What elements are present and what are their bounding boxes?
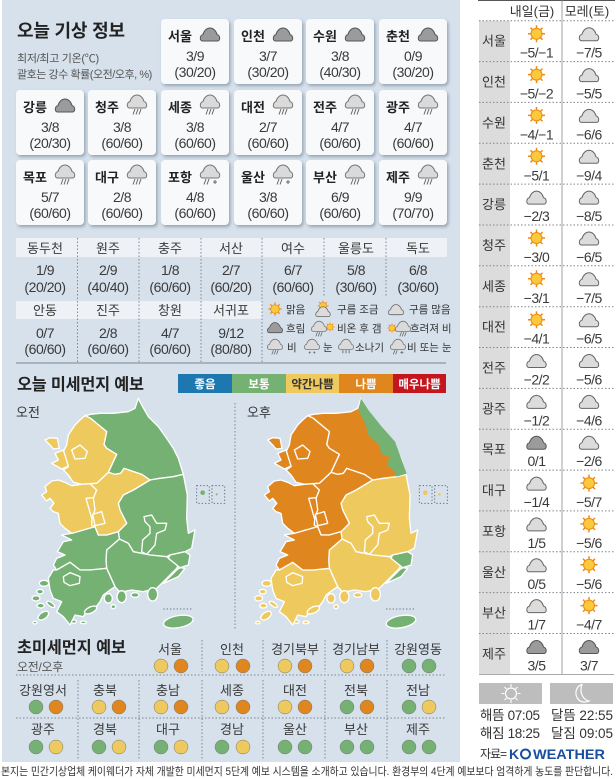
forecast row: 전주: 전주	[482, 360, 506, 376]
forecast row: 광주: −1/2	[524, 412, 550, 428]
card: 울산: (60/60)	[247, 205, 289, 221]
card: 인천: 인천	[241, 29, 265, 44]
weather icon legend: 비	[287, 342, 297, 354]
forecast row: 춘천: 춘천	[482, 156, 506, 171]
map: morning fine dust	[32, 398, 225, 630]
forecast row: 부산: −4/7	[576, 617, 603, 633]
table: other cities: (60/20)	[210, 279, 252, 295]
forecast row: 광주	[479, 388, 614, 428]
air quality colour legend: 약간나쁨	[291, 377, 334, 391]
card: 포항: 4/8	[186, 189, 205, 205]
forecast row: 청주: −3/0	[524, 249, 550, 265]
table: other cities: (60/60)	[149, 279, 191, 295]
card: 광주: (60/60)	[392, 135, 434, 151]
card: 세종: (60/60)	[174, 135, 216, 151]
weather icon legend: 구름 많음	[409, 304, 451, 316]
forecast row: 세종: −3/1	[524, 290, 550, 306]
card: 울산: 3/8	[259, 189, 278, 205]
forecast row: 춘천	[479, 143, 614, 183]
forecast row: 광주: −4/6	[576, 412, 603, 428]
card: 제주: (70/70)	[392, 205, 434, 221]
forecast row: 세종: −7/5	[576, 290, 603, 306]
ultrafine dust row 2	[19, 683, 436, 714]
weather icon legend: 구름 조금	[337, 304, 379, 316]
card: 수원	[306, 19, 374, 84]
forecast row: 울산: −5/6	[576, 576, 603, 592]
subtitle: legend note: 최저/최고 기온(℃)	[17, 52, 99, 65]
card: 강릉: (20/30)	[29, 135, 71, 151]
forecast row: 춘천: −5/1	[524, 167, 550, 183]
sunrise and sunset times: 해뜸 07:05	[480, 708, 540, 723]
forecast row: 수원	[479, 102, 614, 142]
forecast row: 전주: −5/6	[576, 372, 603, 388]
card: 대구: (60/60)	[101, 205, 143, 221]
forecast row: 강릉: 강릉	[482, 197, 506, 212]
air quality colour legend: 나쁨	[355, 377, 377, 391]
table: other cities: 충주	[158, 241, 182, 256]
forecast row: 대전: 대전	[482, 320, 506, 335]
table: other cities: (20/20)	[24, 279, 66, 295]
forecast row: 인천: −5/−2	[520, 86, 554, 102]
card: 제주: 9/9	[404, 189, 423, 205]
ultrafine dust row 2: 강원영서	[19, 683, 67, 698]
card: 전주: 4/7	[331, 119, 350, 135]
forecast row: 부산	[479, 593, 614, 633]
card: 대전: 2/7	[259, 119, 278, 135]
air quality colour legend	[178, 374, 446, 393]
ultrafine dust row 2: 세종	[220, 683, 244, 698]
forecast row: 목포	[479, 429, 614, 469]
forecast header	[510, 4, 609, 19]
weather icon legend: 흐림	[286, 323, 305, 335]
ultrafine dust row 2: 전북	[344, 683, 368, 698]
card: 부산: 부산	[313, 170, 337, 185]
weather icon legend: 소나기	[355, 342, 384, 354]
note: 오전/오후: 오전/오후	[17, 660, 63, 674]
card: 전주: (60/60)	[319, 135, 361, 151]
table: other cities: 진주	[96, 303, 120, 318]
forecast row: 청주: 청주	[482, 238, 506, 253]
icon: moon box	[550, 683, 613, 704]
weather icon legend: 흐려져 비	[410, 323, 452, 335]
forecast header: 내일(금)	[510, 4, 554, 19]
card: 청주: (60/60)	[101, 135, 143, 151]
background panel	[2, 0, 460, 762]
label: 오전: 오전	[16, 405, 40, 420]
card: 청주: 3/8	[113, 119, 132, 135]
ultrafine dust row 2: 충남	[156, 683, 180, 698]
table: other cities: 1/8	[161, 262, 180, 278]
forecast header: 모레(토)	[565, 4, 609, 19]
ultrafine dust row 2: 대전	[283, 683, 307, 698]
table: other cities: 2/9	[99, 262, 118, 278]
card: 목포: (60/60)	[29, 205, 71, 221]
ultrafine dust row 3: 경남	[220, 722, 244, 737]
forecast row: 강릉	[479, 184, 614, 224]
card: 청주	[88, 90, 156, 155]
card: 부산	[306, 160, 374, 225]
table: other cities: 5/8	[347, 262, 366, 278]
card: 춘천: 0/9	[404, 48, 423, 64]
card: 강릉	[16, 90, 84, 155]
card: 청주: 청주	[95, 100, 119, 115]
moonrise and moonset times: 달짐 09:05	[551, 726, 613, 741]
card: 수원: 3/8	[331, 48, 350, 64]
forecast row: 울산	[479, 552, 614, 592]
weather icon legend: 비온 후 갬	[337, 323, 381, 335]
card: 대구: 2/8	[113, 189, 132, 205]
card: 수원: 수원	[313, 29, 337, 44]
forecast row: 목포: 0/1	[528, 453, 546, 469]
moonrise and moonset times	[551, 708, 613, 741]
forecast row: 울산: 울산	[482, 565, 506, 580]
table: other cities: 안동	[33, 303, 57, 318]
card: 제주	[379, 160, 447, 225]
table: other cities: 동두천	[27, 241, 63, 256]
ultrafine dust row 3: 부산	[344, 722, 368, 737]
forecast row: 전주: −2/2	[524, 372, 550, 388]
table: other cities: (30/60)	[397, 279, 439, 295]
ultrafine dust row 3	[29, 722, 436, 754]
icon: sun box	[479, 683, 542, 704]
forecast row: 세종: 세종	[482, 279, 506, 294]
card: 포항: (60/60)	[174, 205, 216, 221]
forecast row: 서울: −7/5	[576, 45, 603, 61]
table: other cities: (30/60)	[335, 279, 377, 295]
card: 춘천: 춘천	[386, 29, 410, 44]
ultrafine dust row 1: 강원영동	[394, 642, 442, 657]
card: 서울: 3/9	[186, 48, 205, 64]
ultrafine dust row 3: 광주	[31, 722, 55, 737]
card: 전주	[306, 90, 374, 155]
forecast row: 포항: 포항	[482, 524, 506, 539]
air quality colour legend: 매우나쁨	[398, 377, 441, 391]
forecast row: 제주: 제주	[482, 646, 506, 662]
source logo: KOWEATHER: 자료=	[480, 747, 507, 761]
ultrafine dust row 1: 서울	[158, 642, 182, 657]
table: other cities: 창원	[158, 303, 182, 318]
forecast row: 제주	[479, 634, 614, 674]
forecast row: 제주: 3/5	[528, 658, 546, 674]
forecast row: 서울	[479, 21, 614, 61]
subtitle: legend note	[17, 52, 152, 81]
air quality colour legend: 좋음	[194, 378, 216, 391]
card: 세종: 세종	[168, 100, 192, 115]
table: other cities: 서산	[219, 241, 243, 256]
card: 대전: (60/60)	[247, 135, 289, 151]
table: other cities: 여수	[281, 241, 305, 256]
table: other cities: 4/7	[161, 325, 180, 341]
source logo: KOWEATHER	[480, 746, 605, 762]
table: other cities: 6/8	[409, 262, 428, 278]
card: 춘천	[379, 19, 447, 84]
moonrise and moonset times: 달뜸 22:55	[551, 708, 613, 723]
card: 인천	[234, 19, 302, 84]
ultrafine dust row 3: 울산	[283, 722, 307, 737]
forecast row: 전주	[479, 348, 614, 388]
vertical dotted divider	[234, 403, 236, 630]
ultrafine dust row 1: 인천	[220, 642, 244, 657]
card: 서울: (30/20)	[174, 64, 216, 80]
forecast row: 포항: −5/6	[576, 535, 603, 551]
forecast row: 세종	[479, 266, 614, 306]
forecast row: 수원: 수원	[482, 115, 506, 130]
table: other cities: 1/9	[36, 262, 55, 278]
source logo: KOWEATHER: K	[509, 746, 519, 762]
forecast row: 목포: −2/6	[576, 453, 603, 469]
card: 춘천: (30/20)	[392, 64, 434, 80]
table: other cities: 독도	[406, 241, 430, 256]
card: 포항: 포항	[168, 170, 192, 185]
weather icon legend: 맑음	[286, 304, 306, 316]
label: 오후: 오후	[247, 405, 271, 420]
forecast row: 대구	[479, 470, 614, 510]
forecast row: 대구: −1/4	[524, 494, 550, 510]
card: 울산	[234, 160, 302, 225]
card: 부산: (60/60)	[319, 205, 361, 221]
card: 포항	[161, 160, 229, 225]
subtitle: legend note: 괄호는 강수 확률(오전/오후, %)	[17, 68, 152, 81]
table: other cities: (60/60)	[272, 279, 314, 295]
forecast row: 서울: 서울	[482, 34, 506, 49]
forecast row: 부산: 1/7	[528, 617, 546, 633]
sunrise and sunset times: 해짐 18:25	[480, 726, 540, 741]
forecast row: 대전: −4/1	[524, 331, 550, 347]
forecast row: 인천: 인천	[482, 75, 506, 90]
card: 전주: 전주	[313, 100, 337, 115]
forecast row: 대전: −6/5	[576, 331, 603, 347]
table: other cities: 6/7	[284, 262, 303, 278]
forecast table frame	[478, 0, 615, 674]
forecast row: 청주	[479, 225, 614, 265]
table: other cities: 원주	[96, 241, 120, 256]
card: 광주: 광주	[386, 100, 410, 115]
forecast row: 광주: 광주	[482, 401, 506, 416]
dotted grid for ultrafine dust	[16, 640, 446, 760]
table: other cities: 9/12	[218, 325, 244, 341]
forecast row: 제주: 3/7	[580, 658, 599, 674]
forecast row: 청주: −6/5	[576, 249, 603, 265]
source logo: KOWEATHER: WEATHER	[533, 746, 605, 762]
table: other cities: (80/80)	[210, 341, 252, 357]
forecast row: 수원: −6/6	[576, 126, 603, 142]
table: other cities: 0/7	[36, 325, 55, 341]
forecast row: 수원: −4/−1	[520, 126, 554, 142]
table: other cities: 울릉도	[338, 241, 374, 256]
divider rule	[16, 362, 446, 364]
weather icon legend: 눈	[323, 342, 333, 354]
forecast row: 대구: −5/7	[576, 494, 603, 510]
forecast row: 대전	[479, 307, 614, 347]
ultrafine dust row 2: 전남	[406, 683, 430, 698]
sunrise and sunset times	[480, 708, 540, 741]
card: 광주: 4/7	[404, 119, 423, 135]
forecast row: 인천	[479, 62, 614, 102]
card: 인천: 3/7	[259, 48, 278, 64]
card: 부산: 6/9	[331, 189, 350, 205]
ultrafine dust row 1: 경기북부	[271, 642, 319, 657]
table: other cities: (60/60)	[149, 341, 191, 357]
table: other cities: 서귀포	[213, 303, 249, 318]
card: 세종	[161, 90, 229, 155]
card: 목포: 5/7	[41, 189, 60, 205]
weather icon legend: 비 또는 눈	[407, 342, 452, 354]
title: 초미세먼지 예보: 초미세먼지 예보	[17, 639, 126, 657]
table: other cities: (60/60)	[24, 341, 66, 357]
card: 수원: (40/30)	[319, 64, 361, 80]
forecast row: 부산: 부산	[482, 606, 506, 621]
table: other cities: (60/60)	[87, 341, 129, 357]
weather icon legend	[267, 300, 452, 354]
card: 강릉: 3/8	[41, 119, 60, 135]
card: 광주	[379, 90, 447, 155]
card: 목포	[16, 160, 84, 225]
card: 강릉: 강릉	[23, 100, 47, 115]
card: 제주: 제주	[386, 170, 410, 185]
air quality colour legend: 보통	[248, 378, 270, 391]
forecast row: 포항: 1/5	[528, 535, 546, 551]
title: 오늘 미세먼지 예보: 오늘 미세먼지 예보	[17, 376, 144, 394]
table bottom line	[479, 674, 614, 676]
title: 오늘 기상 정보: 오늘 기상 정보	[17, 21, 125, 41]
forecast row: 울산: 0/5	[528, 576, 546, 592]
table: other cities: (40/40)	[87, 279, 129, 295]
ultrafine dust row 3: 대구	[156, 722, 180, 737]
card: 대전: 대전	[241, 100, 265, 115]
ultrafine dust row 3: 제주	[406, 722, 430, 737]
table: other cities	[16, 238, 447, 363]
card: 울산: 울산	[241, 170, 265, 185]
card: 대구	[88, 160, 156, 225]
forecast row: 서울: −5/−1	[520, 45, 554, 61]
table: other cities: 2/8	[99, 325, 118, 341]
card: 세종: 3/8	[186, 119, 205, 135]
forecast row: 포항	[479, 511, 614, 551]
ultrafine dust row 2: 충북	[93, 683, 117, 698]
card: 인천: (30/20)	[247, 64, 289, 80]
ultrafine dust row 3: 경북	[93, 722, 117, 737]
ultrafine dust row 1: 경기남부	[332, 642, 380, 657]
forecast row: 춘천: −9/4	[576, 167, 603, 183]
forecast row: 인천: −5/5	[576, 86, 603, 102]
card: 대전	[234, 90, 302, 155]
card: 목포: 목포	[23, 170, 47, 185]
forecast row: 강릉: −8/5	[576, 208, 603, 224]
forecast row: 대구: 대구	[482, 483, 506, 498]
forecast row: 목포: 목포	[482, 442, 506, 457]
forecast row: 강릉: −2/3	[524, 208, 550, 224]
card: 서울: 서울	[168, 29, 192, 44]
table: other cities: 2/7	[222, 262, 241, 278]
ultrafine dust row 1	[154, 642, 442, 673]
map: afternoon fine dust	[255, 398, 447, 630]
card: 대구: 대구	[95, 170, 119, 185]
card: 서울	[161, 19, 229, 84]
